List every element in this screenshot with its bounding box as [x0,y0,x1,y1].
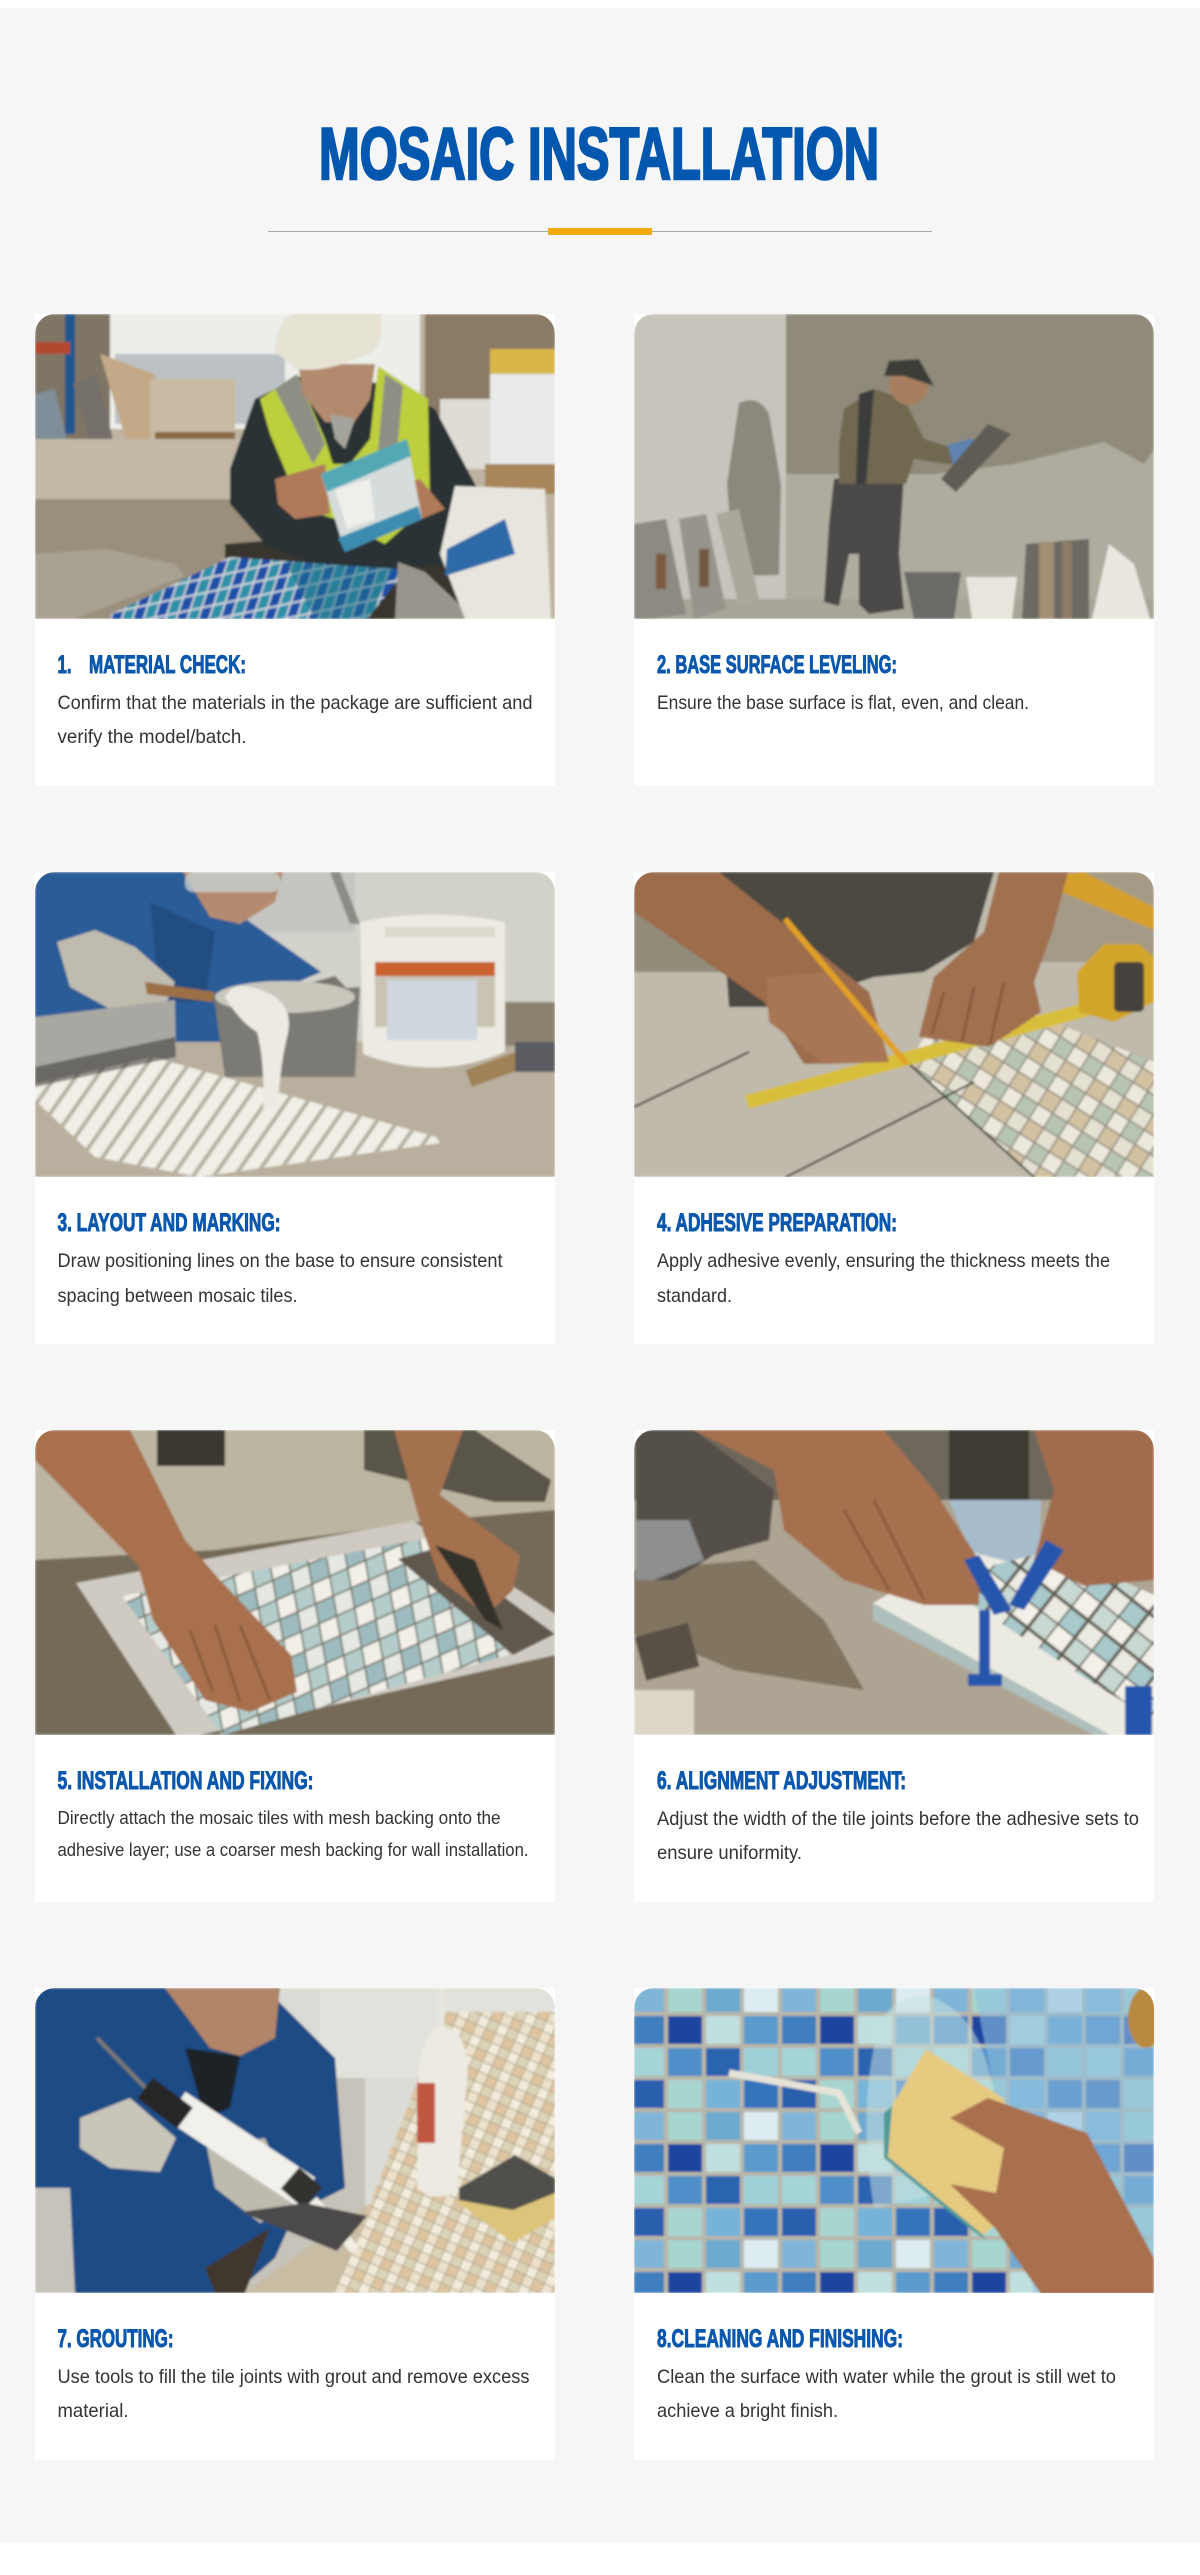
body: step 1 description: verify the model/batch. [58,726,246,748]
text: step 4 [656,1209,1110,1307]
photo: hands adjusting blue spacers [634,1430,1154,1735]
body: step 3 description: Draw positioning lines on the base to ensure consistent [58,1250,503,1272]
body: step 8 description: Clean the surface with water while the grout is still wet to [657,2366,1116,2388]
body: step 3 description: spacing between mosaic tiles. [58,1285,298,1307]
body: step 8 description [657,2366,1116,2422]
body: step 6 description: ensure uniformity. [657,1842,802,1864]
title divider with gold accent [268,228,932,235]
photo: worker plastering wall [634,314,1154,619]
panel: step 4 adhesive preparation [634,872,1154,1344]
text: step 3 [58,1209,503,1307]
panel: step 7 grouting [35,1988,555,2460]
photo: sponge cleaning blue mosaic wall [634,1988,1154,2293]
body: step 4 description [657,1250,1110,1307]
heading: 4. adhesive preparation: 4. ADHESIVE PREPARATION: [657,1209,897,1237]
panel: step 8 cleaning and finishing [634,1988,1154,2460]
body: step 7 description: material. [58,2400,128,2422]
text: step 6 [657,1767,1139,1864]
photo: hands pressing mesh-backed tiles [35,1430,555,1735]
body: step 4 description: Apply adhesive evenly, ensuring the thickness meets the [657,1250,1110,1272]
body: step 5 description: Directly attach the mosaic tiles with mesh backing onto the [58,1808,500,1828]
photo: adhesive poured over notched trowel [35,872,555,1177]
heading: 6. alignment adjustment: 6. ALIGNMENT ADJUSTMENT: [657,1767,906,1795]
text: step 2 [657,651,1029,714]
body: step 3 description [58,1250,503,1307]
body: step 1 description: Confirm that the materials in the package are sufficient and [58,692,532,714]
body: step 4 description: standard. [657,1285,732,1307]
heading: 2. base surface leveling: 2. BASE SURFACE LEVELING: [657,651,897,679]
text: step 8 [657,2325,1116,2422]
heading: 1. material check: MATERIAL CHECK: [89,651,246,679]
body: step 2 description: Ensure the base surface is flat, even, and clean. [657,692,1029,714]
heading: 7. grouting: 7. GROUTING: [58,2325,174,2353]
text: step 7 [58,2325,530,2422]
panel: step 2 base surface leveling [634,314,1154,786]
body: step 5 description: adhesive layer; use a coarser mesh backing for wall installation. [58,1840,528,1860]
body: step 7 description: Use tools to fill the tile joints with grout and remove excess [58,2366,530,2388]
text: step 1 [58,651,532,748]
heading: 1. material check: 1. [58,651,72,679]
heading: 1. material check [58,651,246,679]
body: step 1 description [58,692,532,748]
body: step 5 description [58,1808,528,1860]
panel: step 3 layout and marking [35,872,555,1344]
photo: worker applying grout with caulking gun [35,1988,555,2293]
panel: step 1 material check [35,314,555,786]
text: step 5 [58,1767,528,1860]
panel: step 6 alignment adjustment [634,1430,1154,1902]
photo: marking lines with pencil and tape measure [634,872,1154,1177]
photo: worker checking mosaic package [35,314,555,619]
body: step 7 description [58,2366,530,2422]
heading: 3. layout and marking: 3. LAYOUT AND MARKING: [58,1209,280,1237]
heading: 8. cleaning and finishing: 8.CLEANING AND FINISHING: [657,2325,903,2353]
body: step 8 description: achieve a bright finish. [657,2400,838,2422]
heading: 5. installation and fixing: 5. INSTALLATION AND FIXING: [58,1767,314,1795]
body: step 6 description [657,1808,1139,1864]
panel: step 5 installation and fixing [35,1430,555,1902]
